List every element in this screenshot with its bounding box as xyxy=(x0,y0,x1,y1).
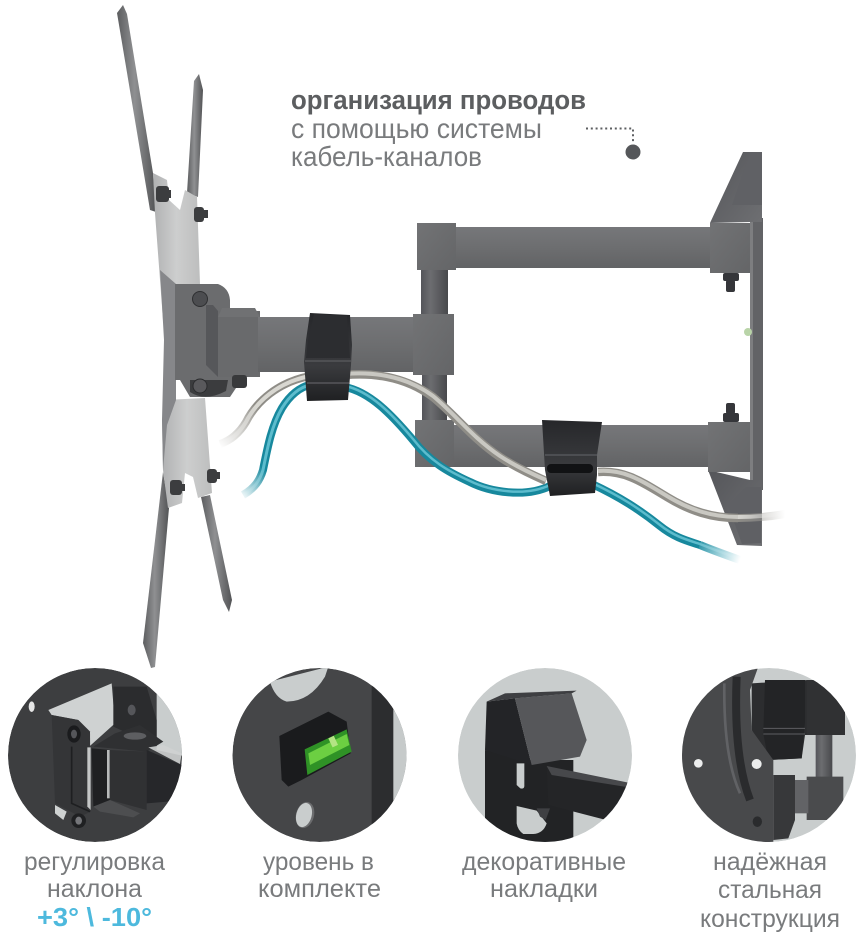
callout: cable management heading xyxy=(291,85,586,172)
central plate xyxy=(153,173,212,508)
feature 2: spirit level xyxy=(232,667,413,903)
lower right collar xyxy=(708,422,750,472)
cable clip on front arm xyxy=(304,313,352,401)
blue cable xyxy=(243,385,740,560)
callout heading: организация проводов xyxy=(291,85,586,115)
callout line 3: кабель-каналов xyxy=(291,141,482,172)
caption: spirit level: уровень в xyxy=(263,848,374,876)
main front arm xyxy=(258,317,415,372)
product: TV wall mount with cables xyxy=(117,5,785,668)
caption: spirit level xyxy=(258,848,381,903)
photo: spirit level xyxy=(232,667,413,847)
caption: steel construction: стальная xyxy=(718,876,822,904)
feature 3: decorative covers xyxy=(458,668,635,903)
caption: decorative covers: декоративные xyxy=(462,848,626,876)
TV plate: lower short blade xyxy=(201,495,232,612)
lower rear arm xyxy=(453,425,710,467)
wall plate xyxy=(708,152,763,546)
feature 4: steel construction xyxy=(668,667,856,933)
feature 1: tilt adjustment xyxy=(8,668,187,932)
dotted leader with pointer dot xyxy=(586,128,640,160)
TV plate: upper short blade xyxy=(187,74,203,197)
photo: tilt bracket xyxy=(8,668,187,842)
caption: steel construction xyxy=(700,848,840,933)
caption: spirit level: комплекте xyxy=(258,875,381,903)
plate bolts xyxy=(156,186,220,495)
top left collar xyxy=(417,223,456,270)
TV plate: lower long blade xyxy=(143,472,169,668)
caption: steel construction: надёжная xyxy=(713,848,827,876)
cable clip on rear arm xyxy=(542,420,602,496)
caption: decorative covers xyxy=(462,848,626,903)
upper vertical pole xyxy=(421,268,448,316)
pivot bracket xyxy=(175,284,260,397)
photo: decorative cover xyxy=(458,668,635,847)
lower left collar xyxy=(415,420,454,467)
caption: tilt adjustment: наклона xyxy=(47,875,142,903)
caption: decorative covers: накладки xyxy=(490,875,598,903)
middle collar xyxy=(413,314,454,375)
TV plate: upper long blade xyxy=(117,5,156,212)
lower vertical pole xyxy=(422,374,447,422)
upper rear arm xyxy=(455,227,711,268)
caption: tilt adjustment xyxy=(24,848,165,932)
caption: steel construction: конструкция xyxy=(700,905,840,933)
caption: tilt adjustment: регулировка xyxy=(24,848,165,876)
wall bolts xyxy=(723,273,739,422)
callout line 2: с помощью системы xyxy=(291,113,542,144)
photo: steel construction xyxy=(682,668,856,842)
grey cable xyxy=(220,373,785,518)
caption: tilt adjustment: +3° \ -10° xyxy=(37,902,152,932)
upper right collar xyxy=(710,223,750,273)
